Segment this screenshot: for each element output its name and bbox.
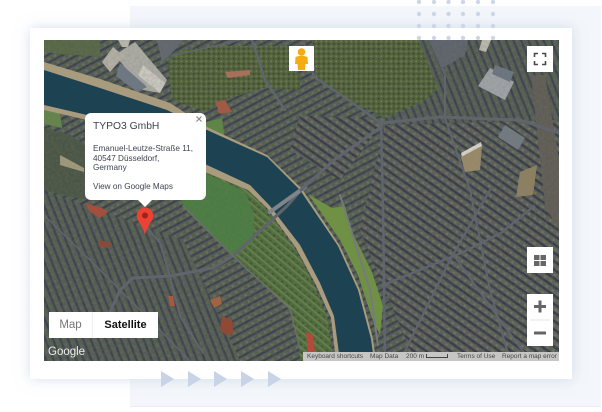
report error: Report a map error (502, 353, 557, 360)
forest and parks (44, 40, 438, 200)
industrial buildings (102, 40, 537, 197)
popup title: TYPO3 GmbH (93, 121, 159, 132)
popup address (93, 144, 193, 172)
map pin (136, 208, 154, 235)
map option (49, 312, 93, 338)
tile layout button (527, 247, 553, 273)
background panel (130, 6, 601, 407)
popup link: View on Google Maps (93, 182, 173, 191)
popup pointer (138, 200, 152, 207)
decorative dot grid (416, 0, 496, 40)
popup address: 40547 Düsseldorf, (93, 154, 159, 162)
icon: zoom plus and minus (530, 300, 550, 334)
icon: pegman (295, 48, 308, 70)
decorative arrow row (161, 371, 281, 387)
popup address: Emanuel-Leutze-Straße 11, (93, 144, 193, 153)
scale (406, 353, 448, 360)
map option: Map (59, 319, 82, 331)
satellite grain (44, 40, 559, 361)
icon: grid (534, 255, 546, 266)
zoom control (527, 294, 553, 346)
rail corridor (531, 75, 559, 230)
white map card (30, 28, 572, 379)
red roofs and sports pitch (85, 70, 315, 352)
map data: Map Data (370, 353, 398, 360)
scale: 200 m (406, 353, 424, 360)
river banks and sand (44, 62, 376, 361)
popup address: Germany (93, 163, 127, 172)
popup close icon (196, 116, 202, 122)
terms of use: Terms of Use (457, 353, 495, 360)
pegman button (289, 46, 314, 71)
map type control (49, 312, 158, 338)
icon: fullscreen (534, 52, 546, 66)
google logo: Google (48, 346, 85, 358)
major roads (44, 40, 559, 361)
keyboard shortcuts: Keyboard shortcuts (307, 353, 363, 360)
map attribution bar (303, 352, 559, 361)
urban base (44, 40, 559, 361)
satellite map (44, 40, 559, 361)
satellite option: Satellite (104, 319, 147, 331)
fullscreen button (527, 46, 553, 72)
map info popup (85, 113, 206, 200)
Rhine river (44, 70, 374, 361)
meadows beside the river (178, 172, 383, 361)
